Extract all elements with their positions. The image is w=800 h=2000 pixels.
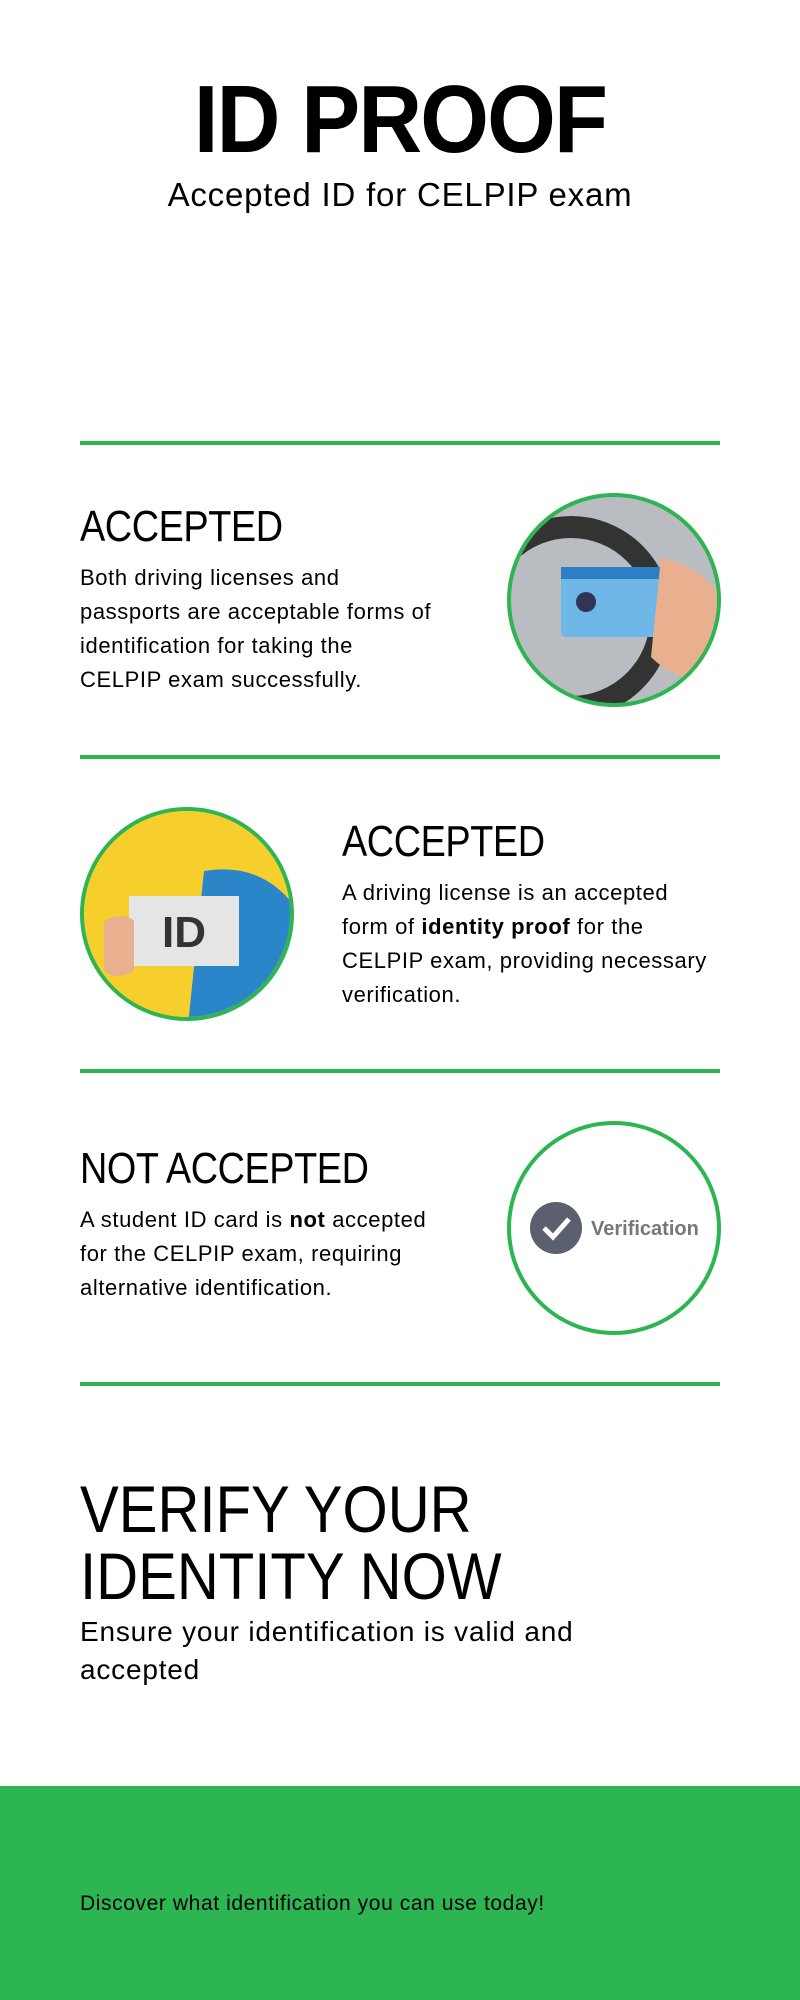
text: form of identity proof for the bbox=[342, 914, 644, 939]
text: passports are acceptable forms of bbox=[80, 599, 431, 624]
section 1 bbox=[80, 502, 431, 692]
heading: NOT ACCEPTED bbox=[80, 1144, 369, 1193]
image: ID card bbox=[80, 807, 294, 1021]
text bbox=[80, 565, 431, 692]
text: identification for taking the bbox=[80, 633, 353, 658]
text bbox=[342, 880, 707, 1007]
footer text: Discover what identification you can use today! bbox=[80, 1892, 545, 1915]
subtitle: Accepted ID for CELPIP exam bbox=[168, 176, 632, 213]
text: A student ID card is not accepted bbox=[80, 1207, 426, 1232]
text: Both driving licenses and bbox=[80, 565, 340, 590]
text: for the CELPIP exam, requiring bbox=[80, 1241, 402, 1266]
verify heading: IDENTITY NOW bbox=[80, 1539, 502, 1613]
text bbox=[80, 1207, 426, 1300]
verify subtitle: Ensure your identification is valid and accepted bbox=[80, 1616, 573, 1685]
text: CELPIP exam, providing necessary bbox=[342, 948, 707, 973]
image: hand holding licence bbox=[507, 493, 721, 707]
section 3 bbox=[80, 1144, 426, 1300]
image: ID card: ID bbox=[162, 908, 206, 957]
verify heading bbox=[80, 1472, 502, 1613]
image: verification badge bbox=[507, 1121, 721, 1335]
title: ID PROOF bbox=[194, 66, 606, 173]
heading: ACCEPTED bbox=[342, 817, 545, 866]
verify heading: VERIFY YOUR bbox=[80, 1472, 472, 1546]
heading: ACCEPTED bbox=[80, 502, 283, 551]
text: alternative identification. bbox=[80, 1275, 332, 1300]
footer bbox=[0, 1786, 800, 2000]
section 2 bbox=[342, 817, 707, 1007]
text: CELPIP exam successfully. bbox=[80, 667, 362, 692]
text: verification. bbox=[342, 982, 461, 1007]
image: verification badge: Verification bbox=[591, 1218, 699, 1240]
text: A driving license is an accepted bbox=[342, 880, 668, 905]
